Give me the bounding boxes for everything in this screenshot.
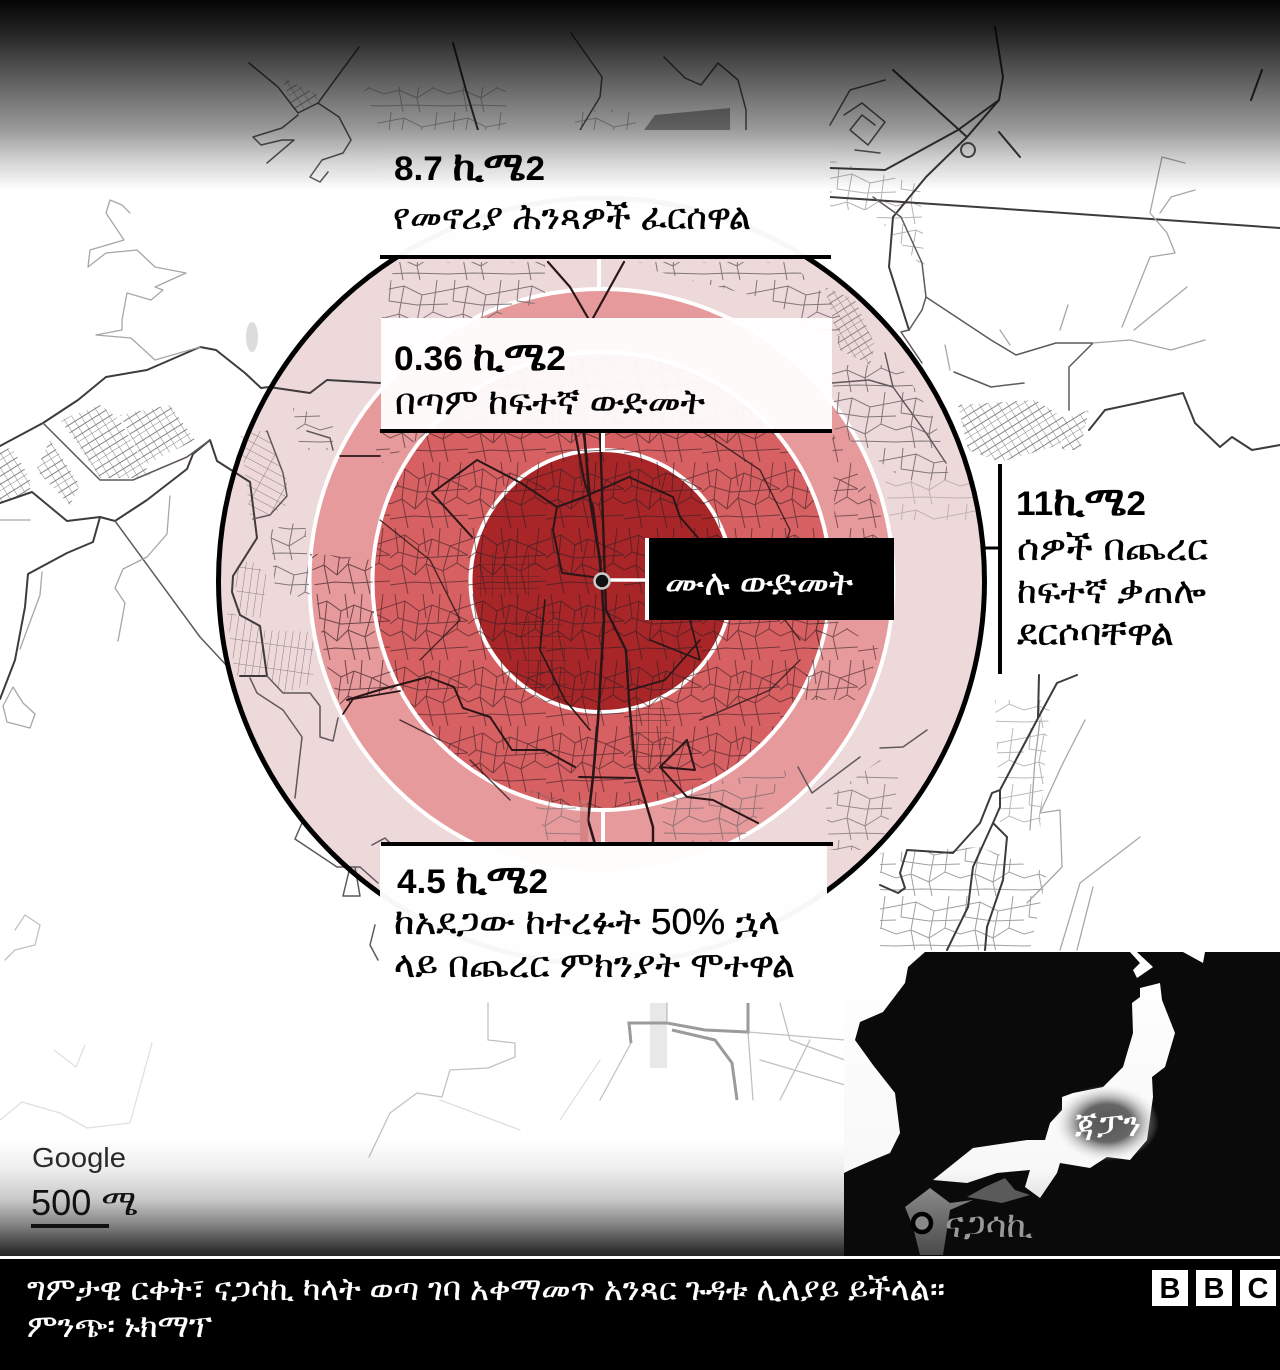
gray oval lake bbox=[246, 322, 258, 352]
footer note and source: ምንጭ፡ ኑክማፕ bbox=[27, 1308, 212, 1344]
land: Honshu bbox=[933, 983, 1175, 1198]
circle: outer residential fire zone bbox=[218, 198, 984, 964]
dense neighbourhoods outside the circles bbox=[0, 77, 1089, 950]
label: 11 sq km with leader: ደርሶባቸዋል bbox=[1017, 612, 1174, 653]
label text: 0.36 sq km bbox=[394, 335, 705, 422]
label text: 4.5 sq km: ከአደጋው ከተረፉት 50% ኋላ bbox=[394, 901, 780, 942]
circle: fireball zone bbox=[470, 450, 732, 712]
roads west of the circle bbox=[0, 200, 392, 960]
severe zone street texture bbox=[375, 354, 829, 808]
street grid patches bbox=[477, 553, 671, 769]
top dark gradient bbox=[0, 0, 1280, 190]
blast circles bbox=[218, 198, 984, 964]
label text: 8.7 sq km: 8.7 ኪሜ2 bbox=[394, 145, 545, 189]
label: 11 sq km with leader: 11ኪሜ2 bbox=[1016, 480, 1146, 524]
label: 11 sq km with leader: ሰዎች በጨረር bbox=[1017, 527, 1208, 568]
label panel: 8.7 sq km bbox=[380, 130, 831, 257]
label text: 4.5 sq km: 4.5 ኪሜ2 bbox=[397, 858, 548, 902]
inset locator map of Japan bbox=[844, 952, 1280, 1256]
fireball zone street texture bbox=[472, 452, 730, 710]
footer note and source bbox=[27, 1271, 945, 1344]
bottom dark gradient bbox=[0, 1140, 844, 1256]
label panel: 0.36 sq km bbox=[380, 318, 832, 431]
BBC logo: B bbox=[1204, 1273, 1224, 1305]
gray block near top bbox=[644, 108, 730, 130]
white spokes between labels and rings bbox=[599, 258, 603, 844]
land: Shikoku bbox=[967, 1178, 1030, 1203]
BBC logo bbox=[1152, 1270, 1276, 1306]
main city roads bbox=[340, 262, 800, 844]
circle: thermal radiation zone bbox=[310, 289, 894, 873]
label panel: 4.5 sq km bbox=[380, 844, 844, 1002]
land: Asian mainland bbox=[844, 952, 925, 1173]
label text: 8.7 sq km bbox=[393, 145, 751, 237]
dense red streets in the rings bbox=[310, 553, 400, 714]
label text: 8.7 sq km: የመኖሪያ ሕንጻዎች ፈርሰዋል bbox=[393, 196, 751, 237]
gray elevated band below centre bbox=[580, 800, 588, 842]
marker: Nagasaki bbox=[913, 1214, 931, 1232]
label text: 4.5 sq km: ላይ በጨረር ምክንያት ሞተዋል bbox=[394, 944, 795, 985]
outer circle outline bbox=[218, 198, 984, 964]
label text: 0.36 sq km: 0.36 ኪሜ2 bbox=[394, 335, 566, 379]
land: Russia fragments bbox=[1130, 952, 1205, 978]
land: Kyushu bbox=[905, 1188, 973, 1255]
scale: Google credit and 500 m: 500 ሜ bbox=[31, 1182, 138, 1223]
BBC logo: C bbox=[1248, 1273, 1269, 1305]
BBC logo: B bbox=[1160, 1273, 1180, 1305]
callout: total destruction bbox=[594, 538, 894, 620]
label: Nagasaki: ናጋሳኪ bbox=[945, 1204, 1033, 1245]
dense neighbourhoods inside the outer ring bbox=[227, 262, 975, 850]
halo behind Japan label bbox=[1055, 1085, 1159, 1161]
roads east of the circle bbox=[798, 157, 1280, 950]
label: 11 sq km with leader: ከፍተኛ ቃጠሎ bbox=[1017, 570, 1206, 611]
footer note and source: ግምታዊ ርቀት፣ ናጋሳኪ ካላት ወጣ ገባ አቀማመጥ አንጻር ጉዳቱ ሊለያይ ይችላል። bbox=[27, 1271, 945, 1307]
label text: 4.5 sq km bbox=[394, 858, 795, 985]
footer bar bbox=[0, 1256, 1280, 1370]
roads in the top band bbox=[249, 27, 1262, 330]
label text: 0.36 sq km: በጣም ከፍተኛ ውድመት bbox=[395, 381, 705, 422]
label: Japan: ጃፓን bbox=[1075, 1106, 1141, 1144]
scale: Google credit and 500 m: Google bbox=[32, 1142, 126, 1173]
callout: total destruction: ሙሉ ውድመት bbox=[665, 562, 853, 603]
circle: severe blast zone bbox=[372, 352, 830, 810]
scale: Google credit and 500 m bbox=[31, 1142, 138, 1228]
label: 11 sq km with leader bbox=[985, 464, 1208, 674]
faded roads near the bottom bbox=[0, 1003, 845, 1157]
